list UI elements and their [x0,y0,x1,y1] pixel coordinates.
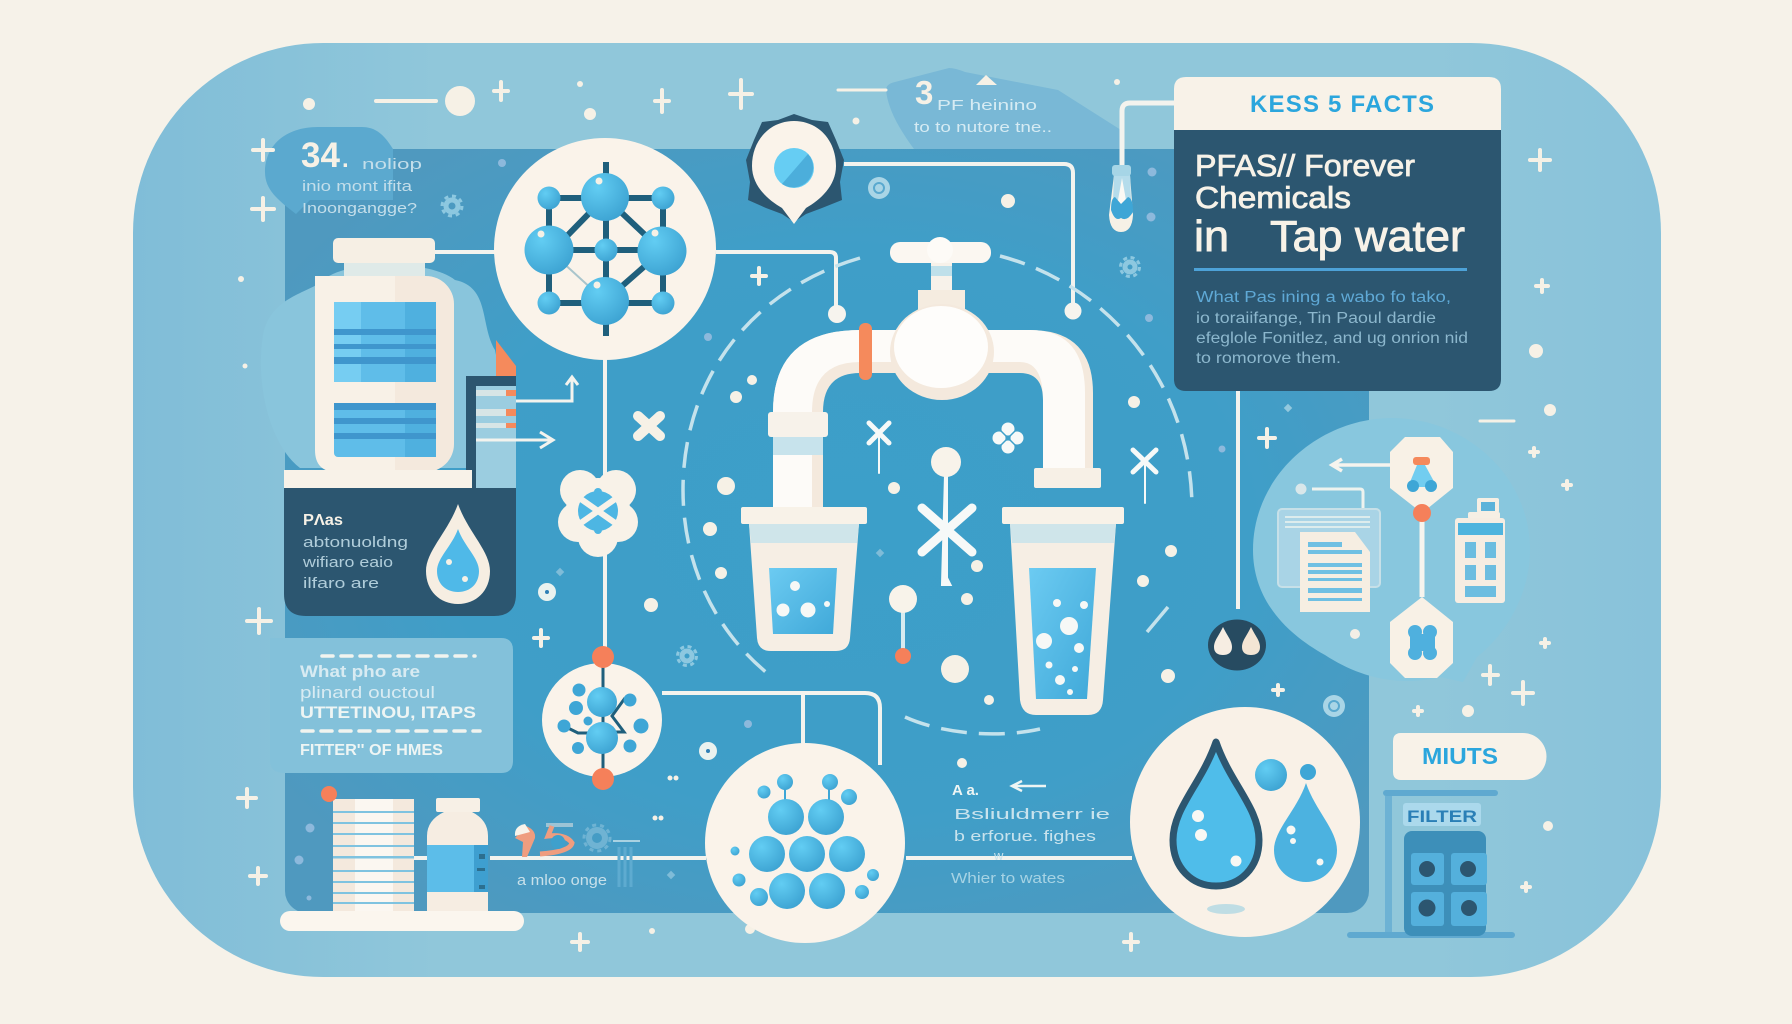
callout: 34 stat bubble: Inoongangge? [302,200,417,217]
icon: tap with two pipes [768,237,1101,507]
icon: filter unit [1347,790,1515,938]
icon: side rack with orange tab [466,340,516,488]
text: bottom centre note [951,781,1110,887]
body text [1196,289,1468,367]
text: bottom centre note: A a. [952,782,979,799]
connector lines [414,103,1238,858]
callout: 34 stat bubble: noliop [362,156,422,173]
icon: filter unit: FILTER [1407,807,1477,826]
title: Tap water [1270,212,1465,261]
callout: top note bubble: 3 [915,74,933,111]
panel: title card [1174,77,1501,391]
icon: dark badge with drops [1208,620,1266,670]
icon: pin with orange dot [889,585,917,664]
icon: small asterisk right [1133,450,1156,503]
dashed circle around tap [683,256,1192,734]
callout: top note bubble [886,68,1121,149]
panel: filter note: UTTETINOU, ITAPS [300,703,476,722]
icon: gears and rings [442,177,1345,760]
panel: PFAS note with drop: ilfaro are [303,575,379,592]
title: in [1194,212,1229,261]
text: bottom centre note: b erforue. fighes [954,828,1096,845]
panel: PFAS note with drop: PΛas [303,512,343,529]
icon: left cup [741,507,867,651]
text: bottom centre note: Whier to wates [951,870,1065,887]
text: small figure and caption [515,824,640,889]
panel: PFAS note with drop: abtonuoldng [303,534,408,551]
shelf [280,911,524,931]
panel: filter note: FITTER'' OF HMES [300,742,443,759]
callout: top note bubble: to to nutore tne.. [914,119,1052,136]
icon: molecule circle [494,138,716,360]
title: PFAS// Forever [1195,148,1415,183]
icon: top hexagon flask [1390,437,1453,513]
arrows from rack [476,377,578,448]
icon: flower badge [558,470,638,557]
icon: small molecule circle [542,646,662,790]
callout: MIUTS pill [1393,733,1546,780]
callout: 34 stat bubble: inio mont ifita [302,178,413,195]
text: bottom centre note: w [993,848,1004,863]
icon: centre snowflake pin [922,447,972,584]
icon: large water drops circle [1130,707,1360,937]
inner central panel [285,149,1369,913]
panel: PFAS note with drop: wifiaro eaio [302,554,393,571]
icon: small asterisk left [869,423,889,473]
icon: book stack [321,786,414,911]
icon: documents [1278,484,1380,612]
callout: 34 stat bubble: 34 [301,136,340,175]
title [1194,148,1465,261]
icon: right cup [1002,507,1124,715]
callout: 34 stat bubble: . [342,146,349,173]
heading: key facts: KESS 5 FACTS [1250,91,1434,118]
icon: bottle with water label [261,238,500,472]
panel: filter note [270,638,513,773]
panel: right process bubble [1253,418,1530,682]
outer background panel [133,43,1661,977]
icon: small bottle [427,798,488,911]
icon: bottom bubble cluster circle [705,743,905,943]
decorative plus signs and dots [238,79,1571,950]
icon: clover [992,422,1024,454]
panel: PFAS note with drop [284,470,516,616]
callout: 34 stat bubble [265,127,422,217]
icon: bottom hexagon [1390,597,1453,678]
body text: efeglole Fonitlez, and ug onrion nid [1196,330,1468,347]
connector end dots [828,302,1082,323]
icon: water drop [426,504,490,604]
icon: tube dropper [1109,165,1133,232]
body text: What Pas ining a wabo fo tako, [1196,289,1451,306]
panel: filter note: What pho are [300,662,420,681]
arrow to documents [1332,459,1390,471]
callout: MIUTS pill: MIUTS [1422,743,1498,769]
body text: to romorove them. [1196,350,1341,367]
icon: building [1455,498,1505,603]
text: bottom centre note: Bsliuldmerr ie [954,806,1110,823]
title: Chemicals [1195,180,1351,215]
icon: location pin badge [746,114,844,224]
body text: io toraiifange, Tin Paoul dardie [1196,310,1436,327]
callout: top note bubble: PF heinino [937,97,1037,114]
text: small figure and caption: a mloo onge [517,872,607,889]
panel: filter note: plinard ouctoul [300,683,435,702]
icon: left clover mark [638,416,660,436]
